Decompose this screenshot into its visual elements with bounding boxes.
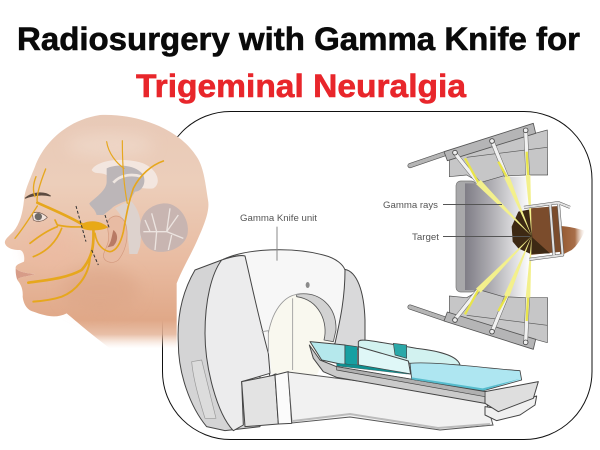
- lips: [16, 268, 35, 280]
- pointer: gamma rays: [443, 204, 502, 206]
- patient neck: [560, 226, 585, 256]
- eye: [32, 212, 47, 221]
- collimator back plate: [456, 181, 476, 292]
- cerebellum: [140, 203, 188, 252]
- brain pale area: [92, 160, 158, 189]
- pointer: target: [443, 236, 530, 238]
- couch foot: [485, 396, 537, 421]
- title line 1: Radiosurgery with Gamma Knife for: [17, 21, 580, 57]
- label: target: Target: [412, 232, 439, 242]
- top collimator: [410, 123, 548, 183]
- couch tray end: [485, 382, 538, 412]
- gamma knife unit illustration: [178, 227, 538, 431]
- iris: [35, 213, 42, 220]
- title line 2: Trigeminal Neuralgia: [136, 68, 467, 104]
- front shield: [358, 347, 411, 374]
- cheek tint: [27, 223, 73, 270]
- trigeminal nerve: [15, 141, 163, 302]
- couch tray dark strip: [337, 367, 485, 397]
- crown highlight: [67, 133, 153, 157]
- mattress shadow: [412, 377, 521, 391]
- mattress: [410, 363, 522, 391]
- back teal strap: [393, 343, 407, 358]
- nerve branch markers: [76, 206, 109, 265]
- bore opening: [268, 294, 336, 375]
- gamma rays diagram: [383, 123, 585, 349]
- base white block: [275, 372, 292, 424]
- patient brain dark: [512, 209, 550, 254]
- couch tray: [309, 345, 485, 403]
- brain grey: [89, 166, 144, 215]
- side handle: [192, 360, 216, 418]
- teal strap: [345, 345, 357, 366]
- ganglion: [83, 222, 107, 230]
- label line: [275, 227, 278, 261]
- machine back shell: [178, 260, 260, 431]
- inner ear: [107, 230, 117, 247]
- bore edge: [262, 294, 298, 370]
- machine mid panel: [205, 256, 270, 431]
- bottom collimator: [410, 290, 548, 349]
- machine front cover: [223, 250, 345, 377]
- head frame light: [524, 203, 570, 259]
- head frame: [524, 203, 570, 259]
- title: [17, 21, 580, 104]
- shielding gradient: [465, 177, 533, 297]
- back shield: [358, 340, 460, 365]
- base front block: [242, 375, 278, 427]
- teal base strip: [337, 363, 411, 374]
- patient scalp: [529, 206, 563, 255]
- machine right side: [333, 269, 365, 350]
- label: gamma knife unit: Gamma Knife unit: [240, 213, 317, 223]
- ear: [103, 216, 127, 262]
- jaw shading: [62, 267, 138, 313]
- table base: [288, 372, 493, 430]
- brain stem light: [115, 200, 141, 254]
- label: gamma rays: Gamma rays: [383, 200, 438, 210]
- bore ring: [297, 294, 336, 342]
- eyebrow: [25, 193, 51, 198]
- head shield: [310, 342, 345, 365]
- rounded frame panel: [162, 112, 592, 440]
- head anatomy illustration: [5, 115, 208, 348]
- table base shadow: [293, 414, 490, 428]
- head silhouette: [5, 115, 208, 348]
- brain pale arc: [113, 175, 142, 183]
- sensor dot: [306, 282, 310, 288]
- gamma beams: [476, 175, 532, 298]
